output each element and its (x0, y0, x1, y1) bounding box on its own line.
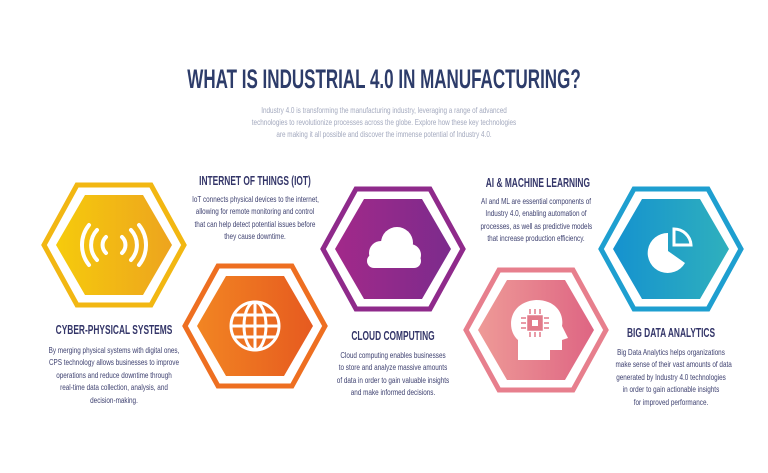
body: IoT (192, 194, 319, 241)
body: IoT: IoT connects physical devices to the internet, (192, 194, 319, 204)
body: cloud: and make informed decisions. (351, 387, 435, 397)
subtitle: are making it all possible and discover the immense potential of Industry 4.0. (276, 129, 492, 139)
body: cyber-physical: CPS technology allows businesses to improve (49, 357, 179, 367)
body: AI: that increase production efficiency. (487, 233, 585, 243)
subtitle (252, 105, 516, 139)
body: AI: processes, as well as predictive models (480, 221, 592, 231)
body: cyber-physical: operations and reduce downtime through (56, 370, 172, 380)
body: AI (480, 196, 592, 243)
text: big data analytics (616, 326, 732, 407)
body: big data: generated by Industry 4.0 technologies (616, 372, 726, 382)
body: big data (616, 347, 732, 407)
hexagon: AI (head with chip icon) (466, 270, 606, 390)
body: AI: Industry 4.0, enabling automation of (485, 208, 587, 218)
heading: cloud: CLOUD COMPUTING (351, 329, 435, 343)
body: cyber-physical: real-time data collection, analysis, and (60, 382, 168, 392)
heading: cyber-physical: CYBER-PHYSICAL SYSTEMS (56, 323, 172, 337)
hexagon: cloud computing (cloud icon) (323, 189, 463, 309)
body: IoT: they cause downtime. (224, 231, 286, 241)
hexagon: big data (pie chart icon) (601, 189, 741, 309)
body: big data: make sense of their vast amounts of data (616, 359, 732, 369)
text: AI & machine learning (480, 176, 592, 243)
subtitle: Industry 4.0 is transforming the manufacturing industry, leveraging a range of advanced (261, 105, 507, 115)
body: big data: in order to gain actionable insights (623, 384, 719, 394)
text: cyber-physical systems (49, 323, 179, 405)
body: AI: AI and ML are essential components of (481, 196, 591, 206)
subtitle: technologies to revolutionize processes across the globe. Explore how these key technologies (252, 117, 516, 127)
body: cyber-physical: By merging physical systems with digital ones, (49, 345, 179, 355)
body: big data: for improved performance. (634, 397, 708, 407)
hexagon: cyber-physical (wireless icon) (44, 185, 184, 305)
body: big data: Big Data Analytics helps organizations (617, 347, 725, 357)
body: cloud: to store and analyze massive amounts (339, 362, 447, 372)
body: cloud: Cloud computing enables businesses (340, 350, 446, 360)
text: cloud computing (337, 329, 449, 397)
heading: big data: BIG DATA ANALYTICS (627, 326, 715, 340)
body: IoT: that can help detect potential issues before (195, 219, 315, 229)
heading: AI: AI & MACHINE LEARNING (486, 176, 590, 190)
body: cloud: of data in order to gain valuable insights (337, 375, 449, 385)
body: IoT: allowing for remote monitoring and control (196, 206, 314, 216)
text: internet of things (192, 174, 319, 241)
body: cyber-physical: decision-making. (90, 395, 138, 405)
title: WHAT IS INDUSTRIAL 4.0 IN MANUFACTURING? (187, 64, 581, 94)
body: cyber-physical (49, 345, 179, 405)
body: cloud (337, 350, 449, 397)
hexagon: IoT (globe icon) (185, 266, 325, 386)
heading: IoT: INTERNET OF THINGS (IOT) (199, 174, 311, 188)
